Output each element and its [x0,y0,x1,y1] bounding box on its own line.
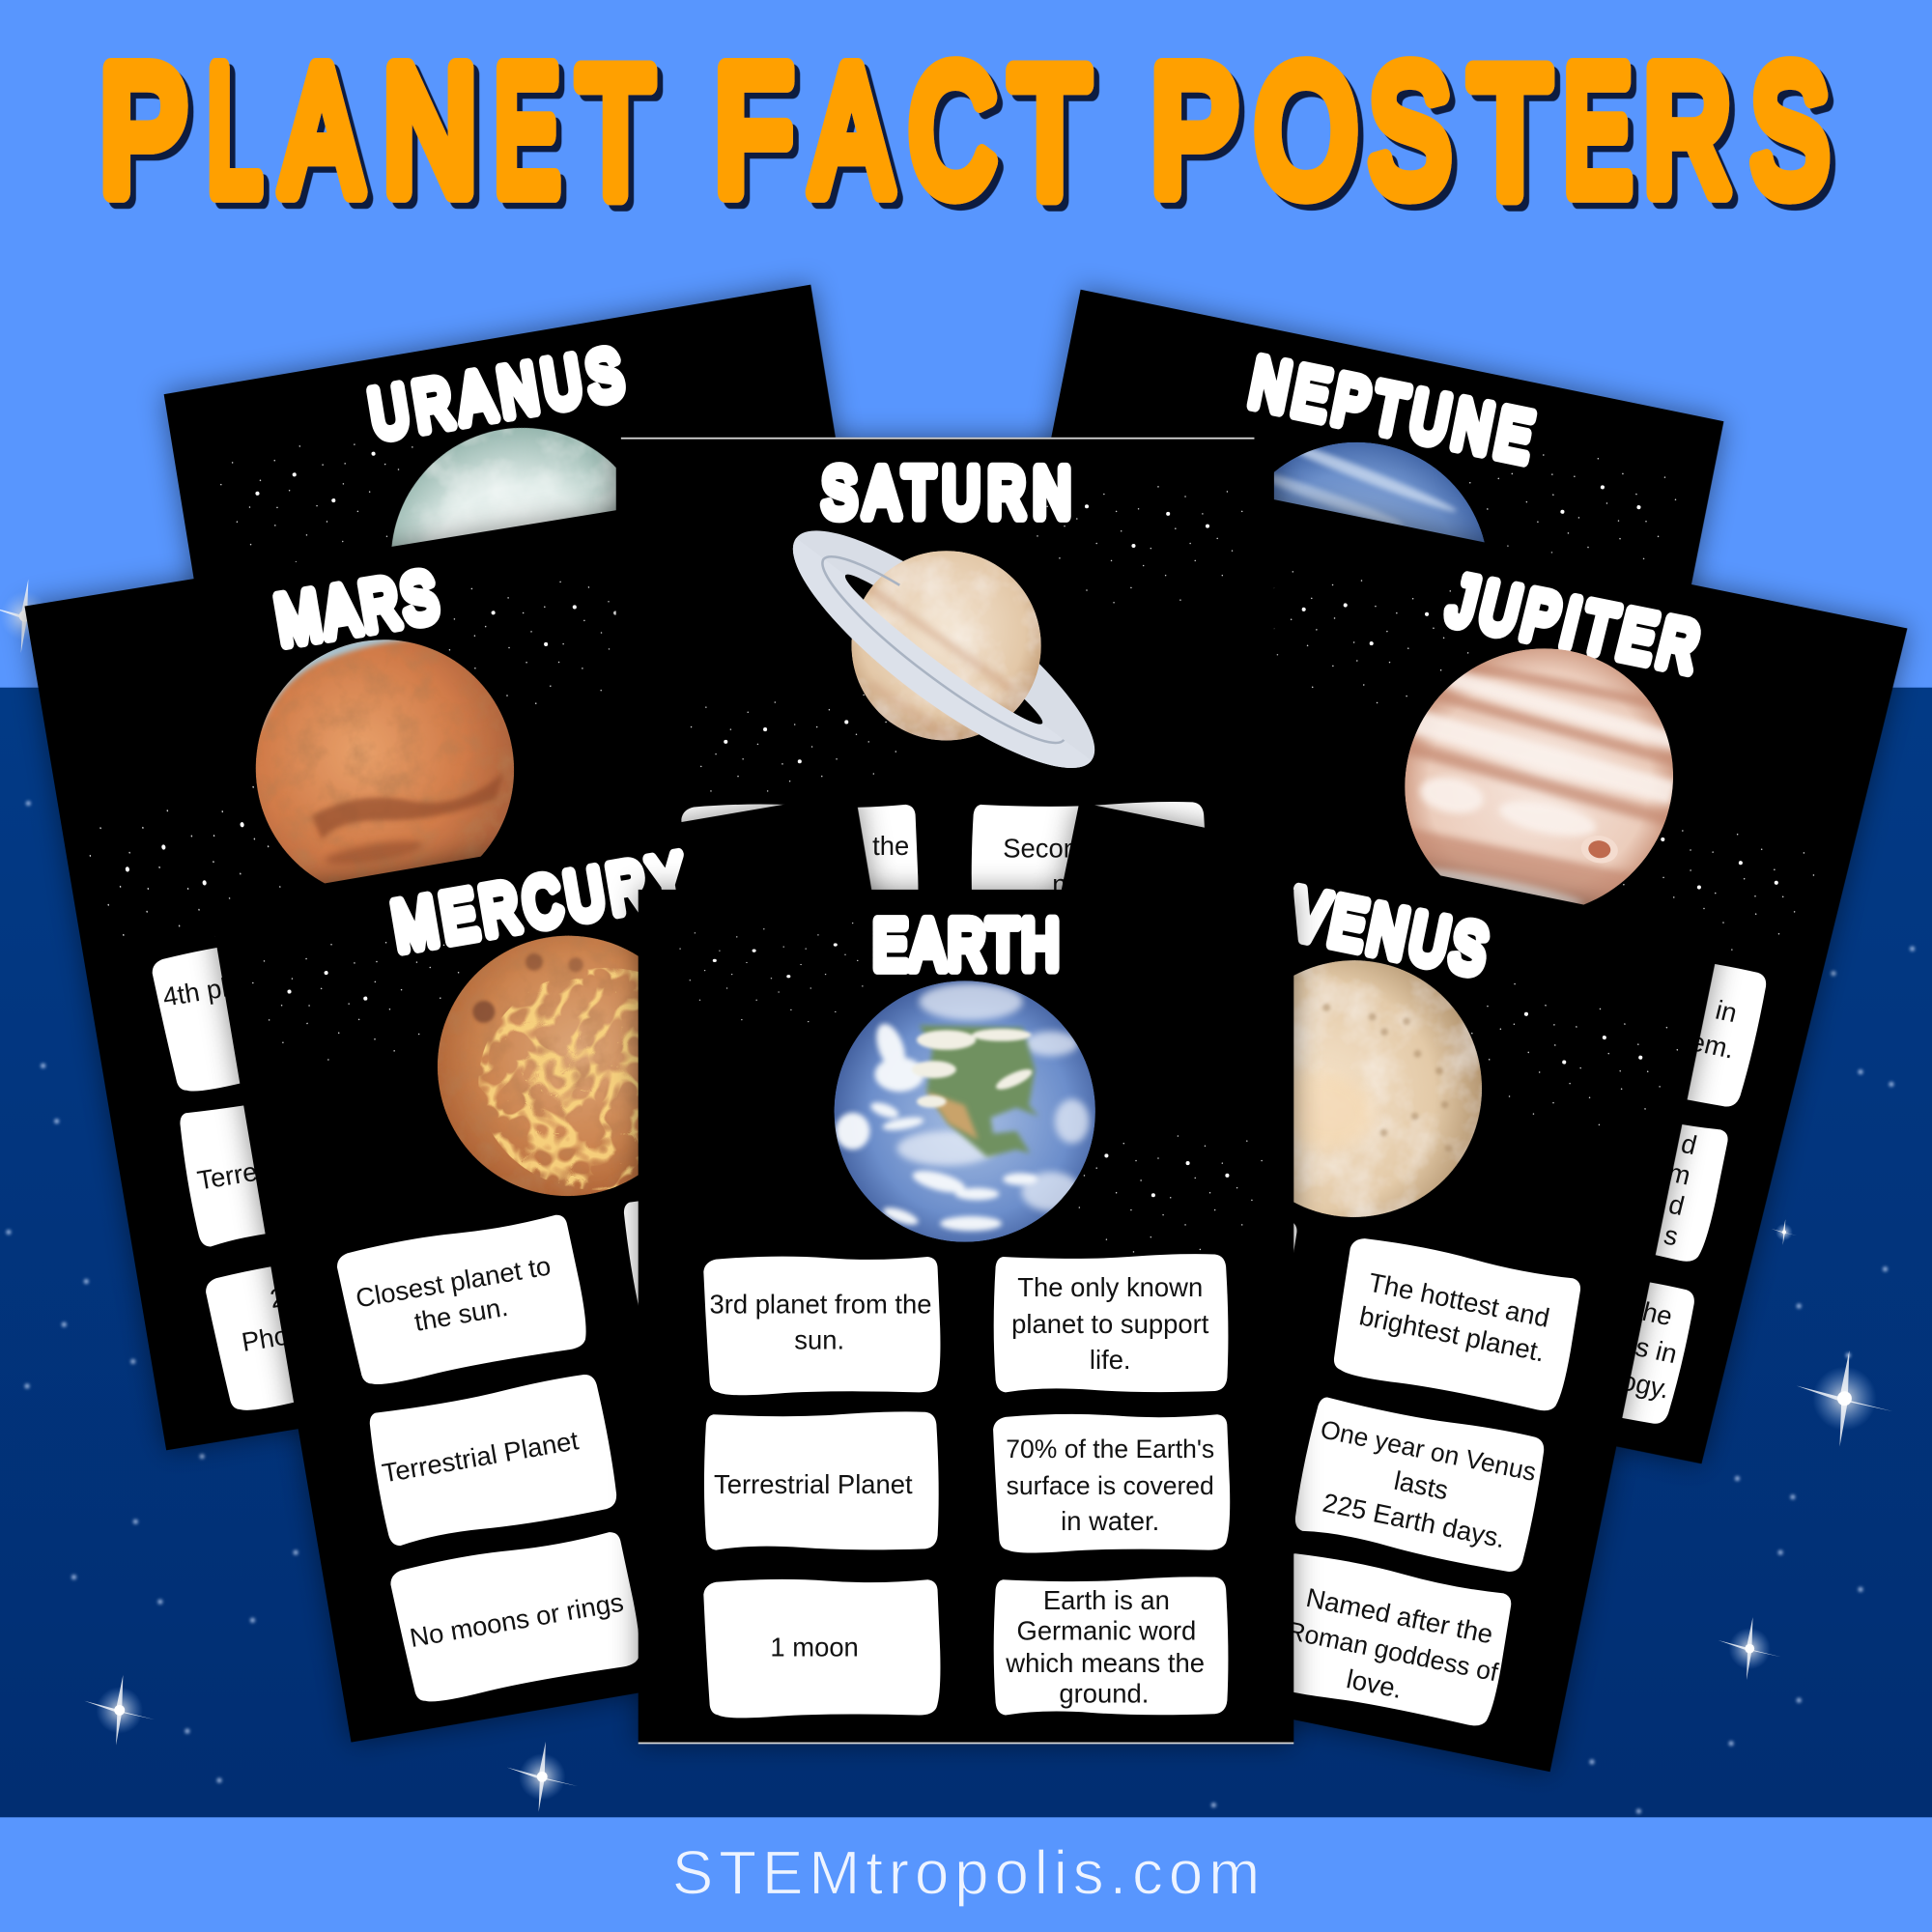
fact card [204,1239,460,1414]
heading: Neptune: NEPTUNE [1244,344,1539,476]
fact card [366,1372,620,1548]
footer text: STEMtropolis.com [672,1837,1260,1907]
fact text: The hottest and [1366,1267,1552,1333]
fact card [1436,1245,1699,1428]
fact text: ogy. [1618,1365,1673,1405]
main title: P [99,30,187,231]
sparkle star [1797,1350,1892,1446]
fact text: 1 moon [770,1632,859,1662]
main title: N [384,30,477,231]
poster: Mars [10,494,616,1461]
heading: Venus: VENUS [1285,875,1493,989]
fact text: 4th planet from the [160,948,384,1012]
fact text: 225 Earth days. [1321,1488,1508,1553]
main title: P [1151,30,1238,231]
fact text: s [1662,1220,1681,1251]
poster: Uranus [164,285,948,1237]
fact card [681,805,919,943]
fact text: Named after the [1304,1582,1495,1649]
fact card [334,1212,591,1389]
fact text: 3rd planet from the [709,1290,932,1320]
main title: C [909,30,996,231]
main title: A [812,30,891,231]
main title [99,30,1829,234]
heading: Earth: EARTH [873,907,1059,983]
main title: E [494,30,559,231]
main title: T [1470,33,1550,234]
poster: Mercury [199,790,889,1751]
fact text: Germanic word [1017,1616,1196,1646]
poster: Neptune [1034,274,1739,587]
sparkle star [84,1675,155,1746]
fact text: Closest planet to [354,1250,553,1313]
fact text: in [1713,995,1740,1028]
planet: Earth [835,980,1095,1242]
fact text: The only known [1017,1272,1203,1302]
fact card [388,1530,644,1706]
fact text: planet to support [1011,1309,1209,1339]
main title: R [1644,30,1731,231]
heading: Saturn: SATURN [822,455,1070,531]
heading: Mercury: MERCURY [387,840,691,966]
heading: Jupiter: JUPITER [1441,562,1706,687]
land [920,1025,1038,1157]
fact text: Secon [1003,834,1078,864]
fact text: Terrestrial Planet [195,1134,396,1196]
great red spot [1581,836,1618,864]
fact text: d [1665,1189,1688,1221]
fact text: brightest planet. [1357,1300,1548,1368]
fact card [703,1579,940,1718]
fact card [994,1254,1228,1392]
poster: Saturn [599,418,1292,890]
fact text: the sun. [412,1292,510,1337]
background: light blue sky [0,0,1932,688]
fact text: One year on Venus [1318,1414,1539,1487]
planet: Uranus [372,408,671,709]
fact text: 70% of the Earth's [1006,1435,1214,1463]
main title: S [1369,30,1450,231]
fact text: ground. [1059,1679,1149,1709]
heading: Uranus: URANUS [365,335,628,454]
main title: L [207,30,261,231]
fact text [1618,1295,1690,1405]
fact card [972,802,1206,940]
fact text: he [1639,1296,1675,1331]
planet: Mars [255,639,514,883]
fact card [1256,1548,1516,1732]
main title: A [282,30,361,231]
fact text: sun. [794,1325,844,1355]
fact card [620,1161,874,1337]
fact text: em. [1687,1026,1738,1065]
planet: Venus [1293,960,1482,1217]
fact card [1325,1234,1585,1417]
fact text: d [1678,1128,1700,1160]
sparkle star [1719,1617,1781,1680]
poster: Earth [639,890,1293,1744]
planet: Mercury [437,935,639,1196]
sparkle star [507,1742,578,1812]
main title: F [715,30,792,231]
fact card [1042,1176,1301,1359]
poster: Jupiter [1273,485,1922,1472]
planet: Saturn with ring [792,530,1095,768]
main title: E [1564,30,1632,231]
main title: S [1750,30,1829,231]
fact text [1650,1127,1703,1251]
fact text: s in [1633,1331,1680,1369]
fact text: Roman goddess of [1284,1616,1501,1688]
sparkle star [1772,1219,1797,1245]
fact text: love. [1344,1663,1405,1704]
main title: T [578,33,653,234]
fact card [703,1257,940,1395]
footer bar [0,1817,1932,1932]
fact text: m [1664,1157,1693,1191]
fact card [176,1074,430,1248]
fact card [1292,1393,1548,1576]
fact card [704,1411,939,1550]
heading: Mars: MARS [270,558,442,660]
fact card [150,921,406,1095]
poster: Venus [1043,802,1733,1780]
fact text: surface is covered [1007,1471,1214,1500]
main title: T [1010,33,1090,234]
fact text: in water. [1061,1506,1159,1536]
main title: O [1256,30,1356,231]
fact card [993,1414,1230,1553]
fact text: Terrestrial Planet [714,1469,913,1499]
fact card [994,1577,1228,1716]
background: navy starfield [0,688,1932,1817]
planet: Jupiter [1405,648,1673,904]
fact text: Phobos, Deimos [240,1296,436,1357]
fact card [1508,928,1771,1110]
planet: Neptune [1273,442,1485,543]
fact text: which means the [1005,1648,1205,1678]
fact text: Terrestrial Planet [380,1425,581,1489]
fact text: n [1052,869,1067,899]
fact text: Earth is an [1043,1585,1170,1615]
fact text: life. [1090,1345,1131,1375]
fact text: lasts [1392,1465,1451,1505]
fact text: No moons or rings [408,1587,626,1653]
sparkle star [0,579,62,653]
fact text: 2 moons: [268,1266,380,1314]
fact card [1467,1085,1733,1267]
fact text: the [872,831,909,861]
